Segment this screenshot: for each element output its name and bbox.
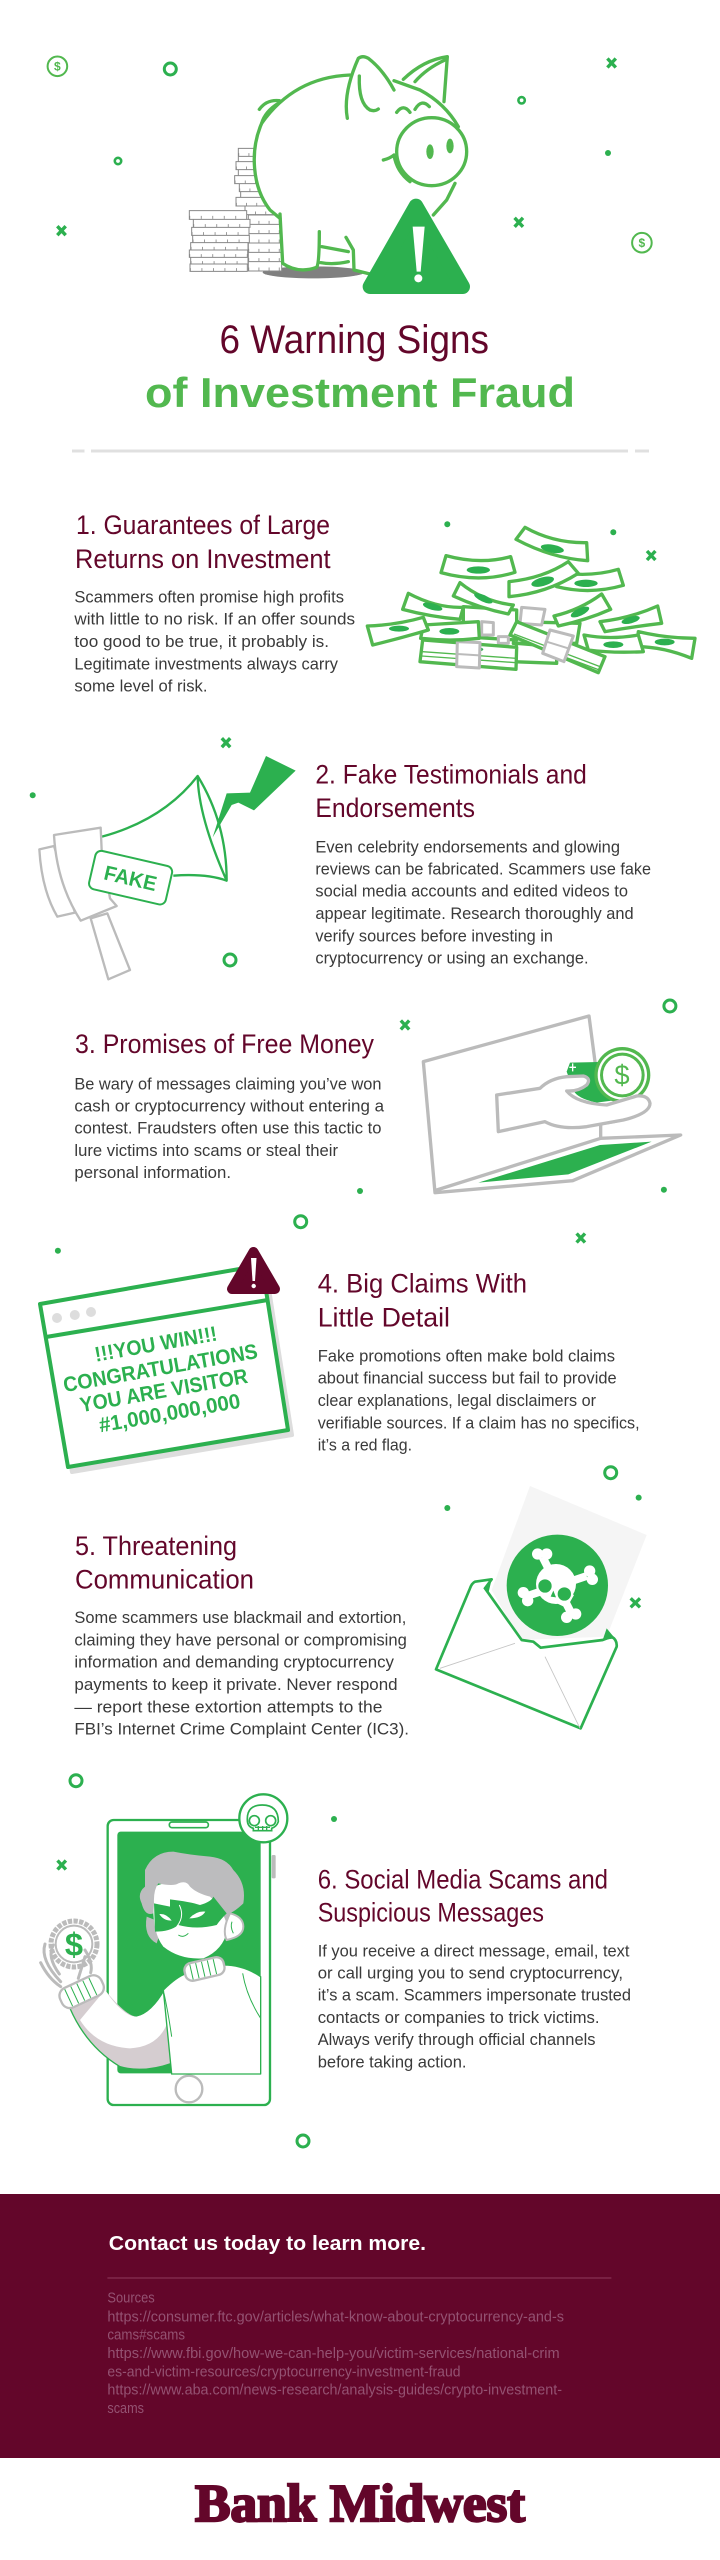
title: of Investment Fraud [145,369,575,416]
body text 2: verify sources before investing in [315,926,553,945]
body text 1: Legitimate investments always carry [74,654,338,673]
decorative confetti 3 [357,1000,676,1194]
title [145,318,575,416]
sources list: https://consumer.ftc.gov/articles/what-know-about-cryptocurrency-and-s [107,2309,564,2325]
decorative confetti 1 [444,521,655,560]
heading 2 [315,759,587,823]
decorative confetti 4 [55,1216,617,1479]
body text 6: Always verify through official channels [318,2030,596,2049]
body text 4: clear explanations, legal disclaimers or [318,1391,596,1410]
sources list: Sources [107,2291,155,2307]
heading 5: Communication [75,1564,254,1594]
body text 3: personal information. [74,1163,231,1182]
body text 5: FBI’s Internet Crime Complaint Center (IC3). [74,1719,409,1738]
heading 4: 4. Big Claims With [318,1269,527,1299]
heading 4 [318,1269,527,1332]
person head [140,1852,244,1959]
icon: dollar coin in hand [41,1921,97,1987]
body text 1 [73,588,355,696]
body text 2: cryptocurrency or using an exchange. [315,948,589,967]
body text 2: social media accounts and edited videos to [315,882,628,901]
body text 1: too good to be true, it probably is. [74,632,329,651]
body text 3: lure victims into scams or steal their [74,1141,338,1160]
sources list: cams#scams [107,2328,185,2344]
decorative confetti: header: $ [639,236,646,250]
icon: dollar coin: $ [614,1060,630,1091]
decorative confetti 6 [58,1775,337,2147]
panel: section 2 fake testimonials [30,738,651,979]
body text 4: about financial success but fail to provide [318,1369,617,1388]
popup text [61,1323,259,1437]
body text 1: with little to no risk. If an offer sounds [73,610,355,629]
body text 5: — report these extortion attempts to the [74,1697,383,1716]
icon: dollar coin [567,1047,650,1103]
heading 2: Endorsements [315,793,475,823]
person arm [70,1990,172,2069]
body text 5: claiming they have personal or compromising [74,1631,407,1650]
panel: section 5 threatening communication [74,1486,647,1738]
popup text: CONGRATULATIONS [61,1340,259,1397]
body text 4: verifiable sources. If a claim has no specifics, [318,1413,640,1432]
heading 1 [75,510,331,574]
sweater cuff [57,1972,107,2011]
body text 6: before taking action. [318,2052,466,2071]
body text 4: Fake promotions often make bold claims [318,1347,615,1366]
illustration: envelope with skull letter [436,1486,647,1728]
body text 5 [74,1608,409,1738]
title: 6 Warning Signs [220,318,489,362]
heading 5 [75,1531,254,1594]
decorative confetti: header [48,57,652,253]
body text 3: cash or cryptocurrency without entering a [74,1096,385,1115]
icon: maroon warning triangle [232,1252,275,1289]
sweater collar [183,1956,226,1982]
body text 2 [315,837,651,967]
icon: warning triangle [370,206,463,287]
illustration: piggy bank with coins and warning sign [189,57,467,287]
icon: skull and crossbones [518,1548,598,1623]
heading 6: Suspicious Messages [318,1898,544,1928]
illustration: pile of cash [367,527,695,673]
body text 6: or call urging you to send cryptocurrency, [318,1964,623,1983]
illustration: hand with coin from laptop [423,1016,681,1193]
popup text: !!!YOU WIN!!! [93,1323,219,1367]
heading 6: 6. Social Media Scams and [318,1864,608,1894]
body text 6 [318,1941,631,2071]
body text 6: it’s a scam. Scammers impersonate trusted [318,1986,631,2005]
body text 4: it’s a red flag. [318,1435,412,1454]
panel: section 4 big claims [40,1216,640,1479]
panel: section 6 social media scams [41,1775,631,2147]
panel: section 3 free money [74,1000,681,1194]
sources list: es-and-victim-resources/cryptocurrency-investment-fraud [107,2364,461,2380]
heading 4: Little Detail [318,1302,450,1332]
icon: dollar coin in hand: $ [65,1926,83,1963]
divider [72,450,649,452]
heading 3: 3. Promises of Free Money [75,1029,374,1059]
decorative confetti 2 [30,738,236,966]
illustration: megaphone [39,756,296,979]
heading 5: 5. Threatening [75,1531,237,1561]
sources list [107,2291,564,2417]
body text 3 [74,1074,385,1182]
panel: section 1 guarantees [73,510,695,696]
heading 1: Returns on Investment [75,544,331,574]
heading 2: 2. Fake Testimonials and [315,759,587,789]
body text 6: contacts or companies to trick victims. [318,2008,600,2027]
body text 2: reviews can be fabricated. Scammers use fake [315,859,651,878]
sources list: https://www.fbi.gov/how-we-can-help-you/victim-services/national-crim [107,2346,560,2362]
illustration: you win popup window [40,1252,292,1472]
body text 4 [318,1347,640,1454]
label: FAKE: FAKE [102,862,159,896]
person body [163,1965,261,2074]
heading 6 [318,1864,608,1928]
panel: footer contact band [0,2194,720,2458]
body text 1: Scammers often promise high profits [74,588,344,607]
body text 5: payments to keep it private. Never respond [74,1675,398,1694]
body text 5: information and demanding cryptocurrency [74,1653,394,1672]
heading 1: 1. Guarantees of Large [76,510,330,540]
body text 3: contest. Fraudsters often use this tactic to [74,1119,382,1138]
body text 3: Be wary of messages claiming you’ve won [74,1074,382,1093]
illustration: masked scammer in phone [41,1794,287,2105]
popup text: YOU ARE VISITOR [78,1365,250,1417]
decorative confetti: header: $ [54,60,61,74]
body text 2: appear legitimate. Research thoroughly and [315,904,634,923]
contact call to action: Contact us today to learn more. [109,2233,426,2255]
body text 1: some level of risk. [74,677,208,696]
sources list: scams [107,2401,144,2417]
body text 6: If you receive a direct message, email, text [318,1941,630,1960]
body text 5: Some scammers use blackmail and extortion, [74,1608,406,1627]
label: FAKE [88,850,173,906]
logo: Bank Midwest: Bank Midwest [195,2475,525,2533]
icon: skull badge [239,1794,287,1842]
body text 2: Even celebrity endorsements and glowing [315,837,620,856]
sources list: https://www.aba.com/news-research/analysis-guides/crypto-investment- [107,2383,562,2399]
popup text: #1,000,000,000 [97,1390,242,1437]
